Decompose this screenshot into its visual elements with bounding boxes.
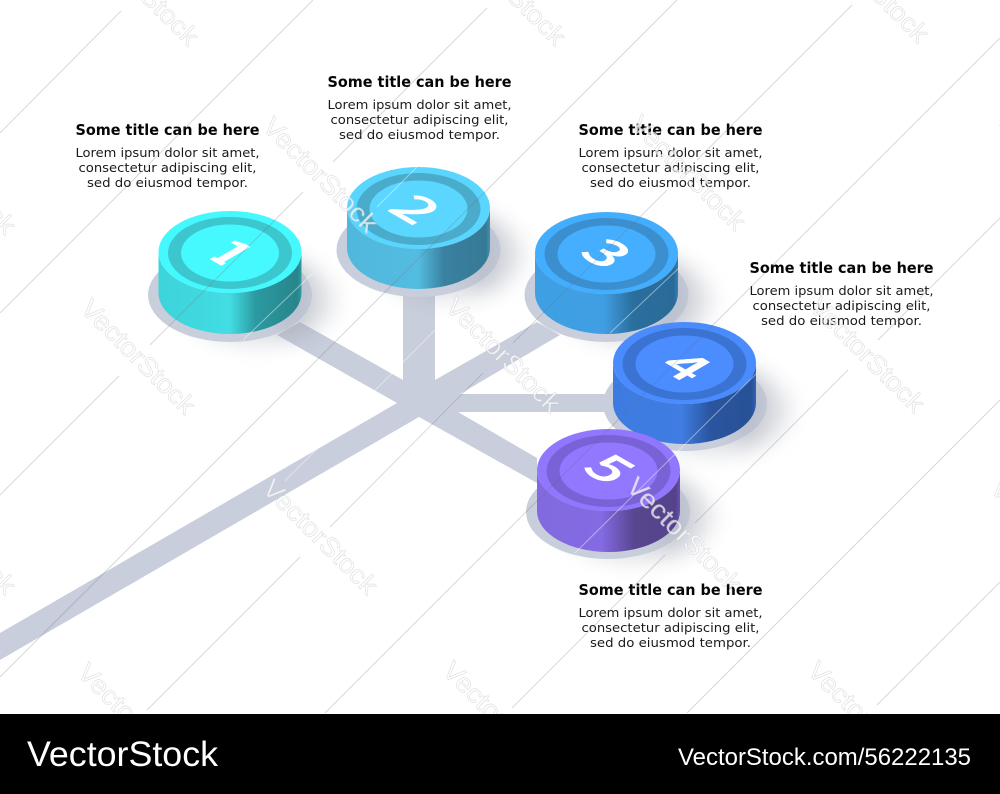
number 4: 4 [644,338,735,391]
text block 3: consectetur adipiscing elit, [582,161,760,176]
footer logo text: VectorStock [27,734,218,774]
text block 3: sed do eiusmod tempor. [590,176,751,191]
text block 2 [328,73,512,143]
text block 1 [76,121,260,191]
cylinder 3 [524,212,711,344]
text block 4: sed do eiusmod tempor. [761,314,922,329]
text block 3 [578,121,762,191]
cylinder 5 [526,429,713,561]
text: VectorStock [437,655,565,783]
text block 4: consectetur adipiscing elit, [752,299,930,314]
text block 1: Some title can be here [76,121,260,139]
text: VectorStock [440,291,568,419]
text: VectorStock [257,473,385,601]
number 1: 1 [188,225,279,278]
text block 3: Lorem ipsum dolor sit amet, [578,146,762,161]
text block 3: Some title can be here [578,121,762,139]
cylinder 4 [603,322,790,454]
text block 5: Some title can be here [578,581,762,599]
text block 5 [578,581,762,651]
text: VectorStock [804,291,932,419]
text block 2: Lorem ipsum dolor sit amet, [328,98,512,113]
text: VectorStock [625,109,753,237]
text block 2: Some title can be here [328,73,512,91]
text: VectorStock [621,471,749,599]
text block 1: Lorem ipsum dolor sit amet, [76,146,260,161]
text block 1: sed do eiusmod tempor. [87,176,248,191]
cylinder 1 [148,211,334,344]
number 2: 2 [373,181,464,234]
footer image id: VectorStock.com/56222135 [678,744,971,771]
cylinder 2 [336,167,523,299]
number 5: 5 [567,441,658,493]
text block 5: sed do eiusmod tempor. [590,636,751,651]
text: VectorStock [72,657,200,785]
number 3: 3 [564,225,655,278]
text: VectorStock [75,293,203,421]
text block 2: consectetur adipiscing elit, [330,113,508,128]
text block 4: Some title can be here [750,259,934,277]
text: VectorStock [802,655,930,783]
text: VectorStock [257,111,385,239]
text block 4: Lorem ipsum dolor sit amet, [750,284,934,299]
text block 4 [750,259,934,329]
text block 2: sed do eiusmod tempor. [339,128,500,143]
footer bar [0,714,1000,794]
text block 5: Lorem ipsum dolor sit amet, [578,606,762,621]
text block 5: consectetur adipiscing elit, [582,621,760,636]
road network [0,290,610,660]
text block 1: consectetur adipiscing elit, [78,161,256,176]
